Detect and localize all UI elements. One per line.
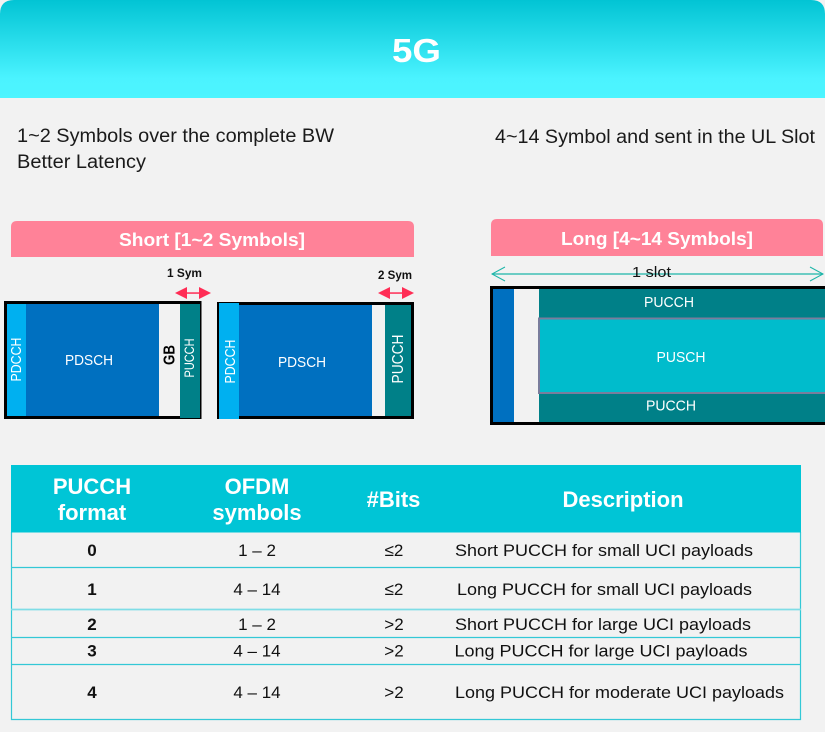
row: format 2: 1 – 2 [238,615,276,634]
table header: symbols [212,500,302,525]
row: format 1: 1 [87,580,97,599]
PUCCH channel [180,304,200,418]
row: format 3: 4 – 14 [233,642,281,660]
row: format 0: ≤2 [385,541,403,560]
PUCCH top: PUCCH [644,294,694,311]
row: format 3: Long PUCCH for large UCI payloads [454,642,748,660]
row: format 3: >2 [384,642,404,660]
row: format 1: ≤2 [385,580,403,599]
title: 5G [392,32,441,69]
row: format 0: Short PUCCH for small UCI payloads [455,541,753,560]
table header: #Bits [367,487,420,512]
row: format 4 [87,683,784,702]
PDSCH channel: PDSCH [65,352,113,369]
PDCCH channel [219,303,239,419]
label: 1 Sym: 1 Sym [167,268,202,280]
label: 1 slot: 1 slot [632,264,672,281]
PUCCH channel: PUCCH [182,338,197,378]
diagram: short PUCCH with 1 symbol [6,302,200,418]
row: format 3 [87,642,748,660]
table: PUCCH formats [11,465,801,720]
text block: short description [17,126,334,173]
heading: long format: Long [4~14 Symbols] [561,229,753,249]
PDSCH channel [26,304,159,416]
table header: format [58,500,127,525]
PUSCH: PUSCH [656,349,706,366]
table header [11,465,801,532]
row: format 0 [87,541,753,560]
text block: short description: 1~2 Symbols over the complete BW [17,126,334,147]
row: format 4: >2 [384,683,404,702]
PUCCH bottom: PUCCH [646,398,696,414]
row: format 0: 0 [87,541,97,560]
row: format 4: Long PUCCH for moderate UCI payloads [455,683,784,702]
PDCCH channel [7,304,26,416]
arrow: 2 symbol width [378,287,414,299]
diagram: long PUCCH slot [492,288,825,424]
PDCCH channel: PDCCH [8,338,25,382]
PDSCH channel: PDSCH [278,354,326,371]
heading: short format: Short [1~2 Symbols] [119,230,305,250]
row: format 1: Long PUCCH for small UCI payloads [457,580,752,599]
row: format 0: 1 – 2 [238,541,276,560]
PDCCH channel: PDCCH [222,340,239,384]
row: format 1 [87,580,752,599]
PUCCH top [539,289,825,318]
row: format 2: >2 [384,615,404,634]
heading: short format [11,221,414,257]
row: format 3: 3 [87,642,97,660]
PUCCH channel [385,305,411,416]
heading: long format [491,219,823,256]
downlink control block [493,289,514,422]
row: format 1: 4 – 14 [233,580,281,599]
text block: long description: 4~14 Symbol and sent in the UL Slot [495,127,816,148]
header banner [0,0,825,98]
PDSCH channel [239,305,372,416]
diagram: short PUCCH with 2 symbols [218,303,412,419]
table header: PUCCH [53,474,131,499]
guard band label: GB [162,345,178,365]
row: format 2: 2 [87,615,97,634]
table header: OFDM [225,474,289,499]
table frame [11,532,801,720]
arrow: 1 symbol width [175,287,211,299]
row: format 4: 4 – 14 [233,683,281,702]
table header: Description [562,487,684,512]
label: 2 Sym: 2 Sym [378,270,412,282]
PUSCH [539,318,825,393]
row: format 2 [87,615,751,634]
PUCCH bottom [539,394,825,422]
PUCCH channel: PUCCH [390,334,407,384]
row: format 2: Short PUCCH for large UCI payloads [455,615,751,634]
text block: short description: Better Latency [17,152,147,173]
row: format 4: 4 [87,683,97,702]
arrow: 1 slot width [492,267,823,281]
